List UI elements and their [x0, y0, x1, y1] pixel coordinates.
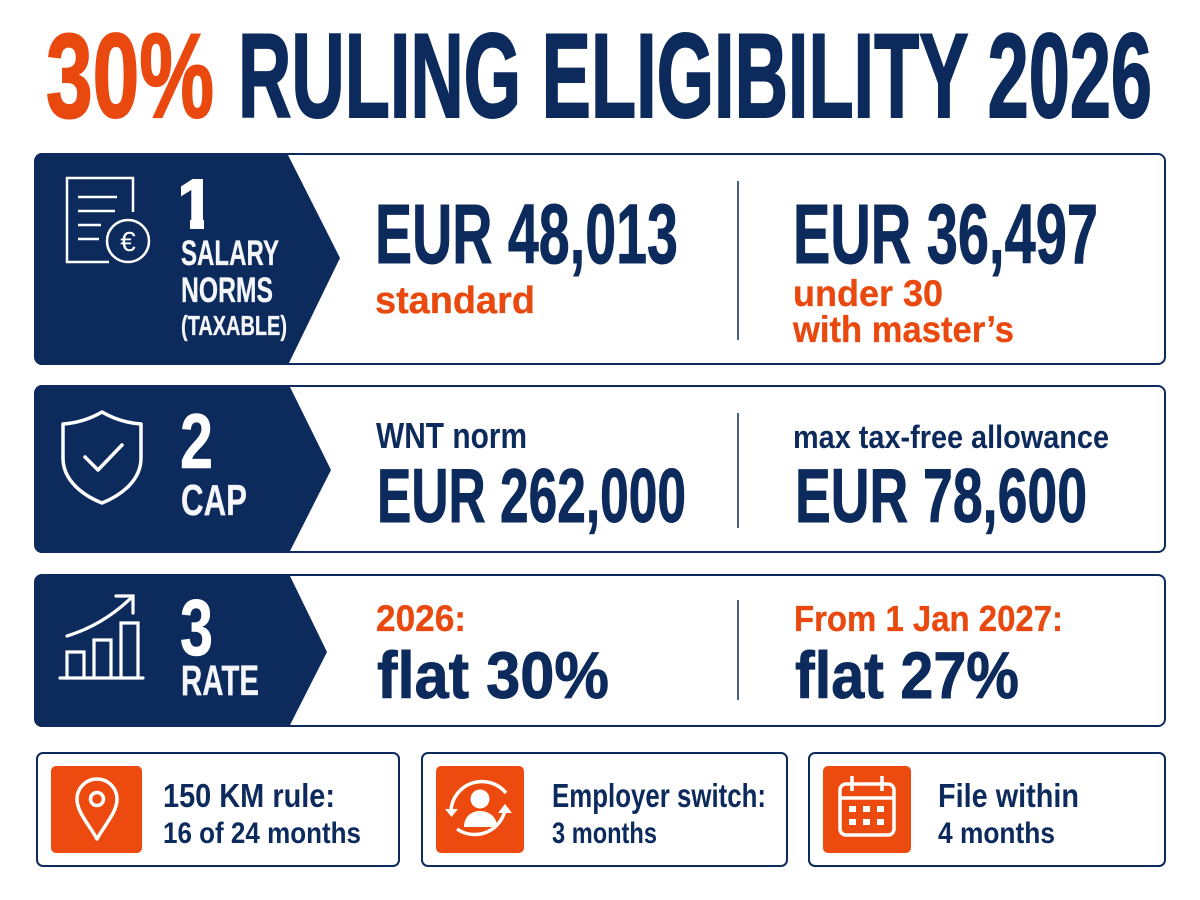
- icon: person with circular arrows: [436, 766, 524, 853]
- text: employer switch: [552, 777, 766, 850]
- under 30 salary norm: [792, 187, 1098, 350]
- standard salary norm: [375, 187, 678, 322]
- heading: salary norms: (TAXABLE): [181, 310, 287, 341]
- icon: document with euro: [67, 178, 149, 262]
- heading: rate: 3: [180, 583, 213, 672]
- heading: salary norms: 1: [176, 165, 215, 243]
- max tax-free allowance: [793, 419, 1109, 539]
- text: employer switch: Employer switch:: [552, 777, 766, 814]
- heading: rate: RATE: [181, 657, 259, 705]
- rate 2027: flat 27%: [795, 638, 1019, 712]
- text: employer switch: 3 months: [552, 817, 657, 850]
- max tax-free allowance: max tax-free allowance: [793, 419, 1109, 455]
- icon: document with euro: €: [120, 226, 136, 257]
- standard salary norm: EUR 48,013: [375, 187, 678, 281]
- text: file within: File within: [938, 777, 1079, 814]
- card: employer switch: [422, 753, 787, 866]
- rate 2026: [376, 598, 609, 712]
- rate 2026: flat 30%: [377, 638, 609, 712]
- heading: cap: 2: [180, 397, 213, 485]
- rate 2027: [794, 598, 1063, 712]
- panel: cap: [35, 385, 1165, 553]
- rate 2027: From 1 Jan 2027:: [794, 598, 1063, 639]
- panel: salary norms: [35, 153, 1165, 365]
- text: 150 km rule: [163, 777, 361, 850]
- text: 150 km rule: 16 of 24 months: [163, 817, 361, 850]
- WNT norm: EUR 262,000: [377, 454, 686, 539]
- icon: rising bar chart: [60, 596, 143, 678]
- max tax-free allowance: EUR 78,600: [795, 454, 1087, 539]
- heading: rate: [180, 583, 259, 705]
- heading: cap: [180, 397, 247, 525]
- under 30 salary norm: under 30: [793, 273, 943, 314]
- card: 150 km rule: [37, 753, 399, 866]
- WNT norm: WNT norm: [376, 415, 527, 456]
- rate 2026: 2026:: [376, 598, 466, 639]
- title: 30%: [46, 9, 214, 143]
- text: file within: [938, 777, 1079, 850]
- panel: rate: [35, 574, 1165, 727]
- icon: calendar: [823, 766, 911, 853]
- WNT norm: [376, 415, 686, 539]
- standard salary norm: standard: [375, 280, 535, 322]
- icon: shield with check: [63, 412, 141, 503]
- text: file within: 4 months: [938, 817, 1055, 850]
- heading: salary norms: [181, 179, 286, 342]
- text: 150 km rule: 150 KM rule:: [163, 777, 335, 814]
- card: file within: [809, 753, 1165, 866]
- heading: salary norms: SALARY: [181, 234, 279, 273]
- heading: salary norms: NORMS: [181, 271, 273, 310]
- icon: location pin: [51, 766, 142, 853]
- heading: cap: CAP: [181, 476, 247, 525]
- under 30 salary norm: with master’s: [792, 309, 1014, 350]
